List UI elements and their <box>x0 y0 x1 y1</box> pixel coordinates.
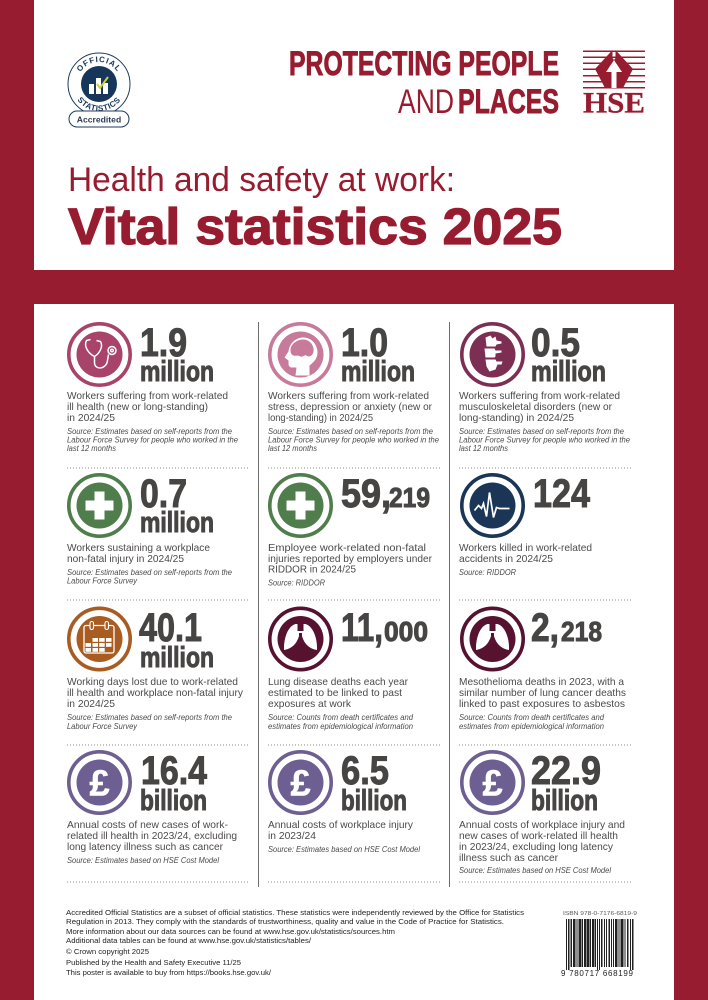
logo: Official Statistics Accredited: OFFICIAL <box>77 56 120 72</box>
number <box>341 749 407 817</box>
stat panel: 124 <box>459 472 592 577</box>
description: new cases of work-related ill health <box>459 831 618 842</box>
footer text: Additional data tables can be found at www.hse.gov.uk/statistics/tables/ <box>66 936 312 945</box>
icon: heartbeat <box>462 475 523 536</box>
icon: plus <box>69 475 130 536</box>
source: estimates from epidemiological information <box>459 722 605 731</box>
description <box>459 677 626 710</box>
description: injuries reported by employers under <box>268 554 433 565</box>
number: 40.1 <box>139 606 202 650</box>
description: linked to past exposures to asbestos <box>459 699 625 710</box>
number <box>341 321 415 388</box>
number: 0.7 <box>140 472 187 516</box>
description: musculoskeletal disorders (new or <box>459 402 613 413</box>
footer text: Published by the Health and Safety Executive 11/25 <box>66 958 241 967</box>
description <box>67 543 210 565</box>
stat panel: 40.1 million <box>67 606 244 731</box>
number: 0.5 <box>531 321 580 365</box>
column dividers <box>258 322 450 887</box>
description: similar number of lung cancer deaths <box>459 688 626 699</box>
description: Workers suffering from work-related <box>268 391 429 402</box>
icon: pound <box>462 752 523 813</box>
description: in 2024/25 <box>67 699 115 710</box>
source <box>459 713 605 731</box>
title <box>68 161 562 255</box>
description <box>268 391 433 424</box>
description: long-standing) in 2024/25 <box>459 413 574 424</box>
stat panel: 16.4 billion <box>67 749 237 865</box>
description: long latency illness such as cancer <box>67 842 224 853</box>
heading: Protecting people and places: AND <box>398 83 454 121</box>
description: stress, depression or anxiety (new or <box>268 402 433 413</box>
number: 6.5 <box>341 749 389 793</box>
description: non-fatal injury in 2024/25 <box>67 554 184 565</box>
description: Working days lost due to work-related <box>67 677 238 688</box>
description: Mesothelioma deaths in 2023, with a <box>459 677 624 688</box>
source: Source: Estimates based on self-reports from the <box>67 568 233 577</box>
source: Labour Force Survey for people who worked in the <box>67 436 239 444</box>
title: Health and safety at work: <box>68 161 455 199</box>
source: last 12 months <box>459 444 508 453</box>
description <box>459 820 625 864</box>
number: 16.4 <box>141 749 208 793</box>
number: 59, <box>341 472 391 516</box>
stat panel: 6.5 billion <box>268 749 420 854</box>
number: million <box>341 356 415 388</box>
stat panel: 0.7 million <box>67 472 233 586</box>
icon: pound <box>69 752 130 813</box>
number: 2, <box>531 606 559 650</box>
number <box>531 606 602 650</box>
logo: Official Statistics Accredited: Accredited <box>77 114 121 124</box>
number: million <box>140 642 214 674</box>
source <box>268 427 440 453</box>
number: million <box>140 507 214 539</box>
stat panel: 1.9 million <box>67 321 239 453</box>
number: 219 <box>389 482 430 513</box>
source: Source: Counts from death certificates and <box>459 713 605 722</box>
description: Annual costs of new cases of work- <box>67 820 228 831</box>
stat panel: 11,000 <box>268 606 428 731</box>
description: ill health and workplace non-fatal injury <box>67 688 244 699</box>
description <box>268 543 433 576</box>
number <box>341 472 430 516</box>
logo: HSE: HSE <box>583 86 645 120</box>
source: estimates from epidemiological information <box>268 722 414 731</box>
source: Source: Estimates based on HSE Cost Model <box>268 845 420 854</box>
footer text: Regulation in 2013. They comply with the standards of trustworthiness, quality and value in the Code of Practice for Statistics. <box>66 917 504 926</box>
description <box>459 543 592 565</box>
stat panel: 59,219 <box>268 472 433 588</box>
barcode: ISBN 978-0-7176-6819-9 <box>563 911 637 917</box>
stat panel: 1.0 million <box>268 321 440 453</box>
description <box>268 677 409 710</box>
footer text: This poster is available to buy from https://books.hse.gov.uk/ <box>66 968 272 977</box>
icon: head <box>270 324 331 385</box>
source: Source: Estimates based on self-reports from the <box>67 713 233 722</box>
description: Annual costs of workplace injury and <box>459 820 625 831</box>
footer text <box>66 908 524 977</box>
description: Workers killed in work-related <box>459 543 592 554</box>
number <box>341 606 428 650</box>
stat panel: 2,218 <box>459 606 626 731</box>
source: last 12 months <box>67 444 116 453</box>
number: billion <box>140 785 207 817</box>
description: in 2023/24 <box>268 831 316 842</box>
description <box>459 391 620 424</box>
stat panel: 22.9 billion <box>459 749 625 875</box>
source: Source: Counts from death certificates and <box>268 713 414 722</box>
heading: Protecting people and places <box>289 45 559 121</box>
icon: pound: £ <box>290 762 311 804</box>
number: billion <box>341 785 407 817</box>
source: Source: Estimates based on self-reports from the <box>67 427 233 436</box>
description: Annual costs of workplace injury <box>268 820 414 831</box>
source <box>67 568 233 586</box>
number <box>531 321 606 388</box>
source <box>67 713 233 731</box>
description: RIDDOR in 2024/25 <box>268 564 356 576</box>
heading: Protecting people and places: PROTECTING PEOPLE <box>289 45 559 83</box>
number: 000 <box>384 616 428 647</box>
number: million <box>140 356 214 388</box>
source: last 12 months <box>268 444 317 453</box>
number: 124 <box>533 472 591 516</box>
description: illness such as cancer <box>459 853 559 864</box>
description: in 2023/24, excluding long latency <box>459 842 614 853</box>
footer text: More information about our data sources can be found at www.hse.gov.uk/statistics/sources.htm <box>66 927 395 936</box>
icon: pound: £ <box>89 762 110 804</box>
number <box>140 472 214 539</box>
heading: Protecting people and places: PLACES <box>458 83 559 121</box>
description <box>67 677 244 710</box>
barcode: 9 780717 668199 <box>561 969 634 978</box>
barcode <box>561 911 637 978</box>
source: Labour Force Survey <box>67 722 138 731</box>
source: Labour Force Survey for people who worked in the <box>459 436 631 444</box>
logo: HSE <box>583 50 645 120</box>
icon: lungs <box>270 608 331 670</box>
source: Labour Force Survey for people who worked in the <box>268 436 440 444</box>
icon: pound <box>270 752 331 813</box>
number: million <box>531 356 606 388</box>
number: billion <box>531 785 598 817</box>
number <box>140 749 208 817</box>
description: estimated to be linked to past <box>268 688 402 699</box>
description: Workers suffering from work-related <box>459 391 620 402</box>
number: 22.9 <box>531 749 601 793</box>
source: Source: RIDDOR <box>459 568 516 577</box>
icon: calendar <box>69 608 130 670</box>
source <box>459 427 631 453</box>
stat panel: 0.5 million <box>459 321 631 453</box>
logo: Official Statistics Accredited: STATISTICS <box>78 97 120 110</box>
number: 11, <box>341 606 383 650</box>
source: Source: Estimates based on self-reports from the <box>268 427 434 436</box>
description: Workers sustaining a workplace <box>67 543 210 554</box>
source: Source: RIDDOR <box>268 578 325 588</box>
description: exposures at work <box>268 699 352 710</box>
source: Labour Force Survey <box>67 576 138 586</box>
number <box>139 606 214 674</box>
number: 1.0 <box>341 321 388 365</box>
icon: pound: £ <box>482 762 503 804</box>
footer text: © Crown copyright 2025 <box>66 947 149 956</box>
description: in 2024/25 <box>67 413 115 424</box>
description: Workers suffering from work-related <box>67 391 228 402</box>
number <box>531 749 601 817</box>
icon: spine <box>462 324 523 385</box>
description <box>67 820 237 853</box>
description: long-standing) in 2024/25 <box>268 413 373 424</box>
source <box>268 713 414 731</box>
footer text: Accredited Official Statistics are a subset of official statistics. These statistics were independently reviewed by the Office for Statistics <box>66 908 524 917</box>
icon: stethoscope <box>69 324 130 385</box>
description: Lung disease deaths each year <box>268 677 409 688</box>
description: related ill health in 2023/24, excluding <box>67 831 237 842</box>
description <box>268 820 414 842</box>
logo: Official Statistics Accredited <box>68 52 130 128</box>
number: 1.9 <box>140 321 187 365</box>
title: Vital statistics 2025 <box>68 198 562 255</box>
icon: plus <box>270 475 331 536</box>
number <box>140 321 214 388</box>
source: Source: Estimates based on HSE Cost Model <box>459 866 611 875</box>
source: Source: Estimates based on self-reports from the <box>459 427 625 436</box>
description <box>67 391 228 424</box>
number: 218 <box>561 616 602 647</box>
description: accidents in 2024/25 <box>459 554 553 565</box>
source <box>67 427 239 453</box>
description: Employee work-related non-fatal <box>268 543 426 554</box>
source: Source: Estimates based on HSE Cost Model <box>67 856 219 865</box>
icon: lungs <box>462 608 523 670</box>
description: ill health (new or long-standing) <box>67 402 208 413</box>
